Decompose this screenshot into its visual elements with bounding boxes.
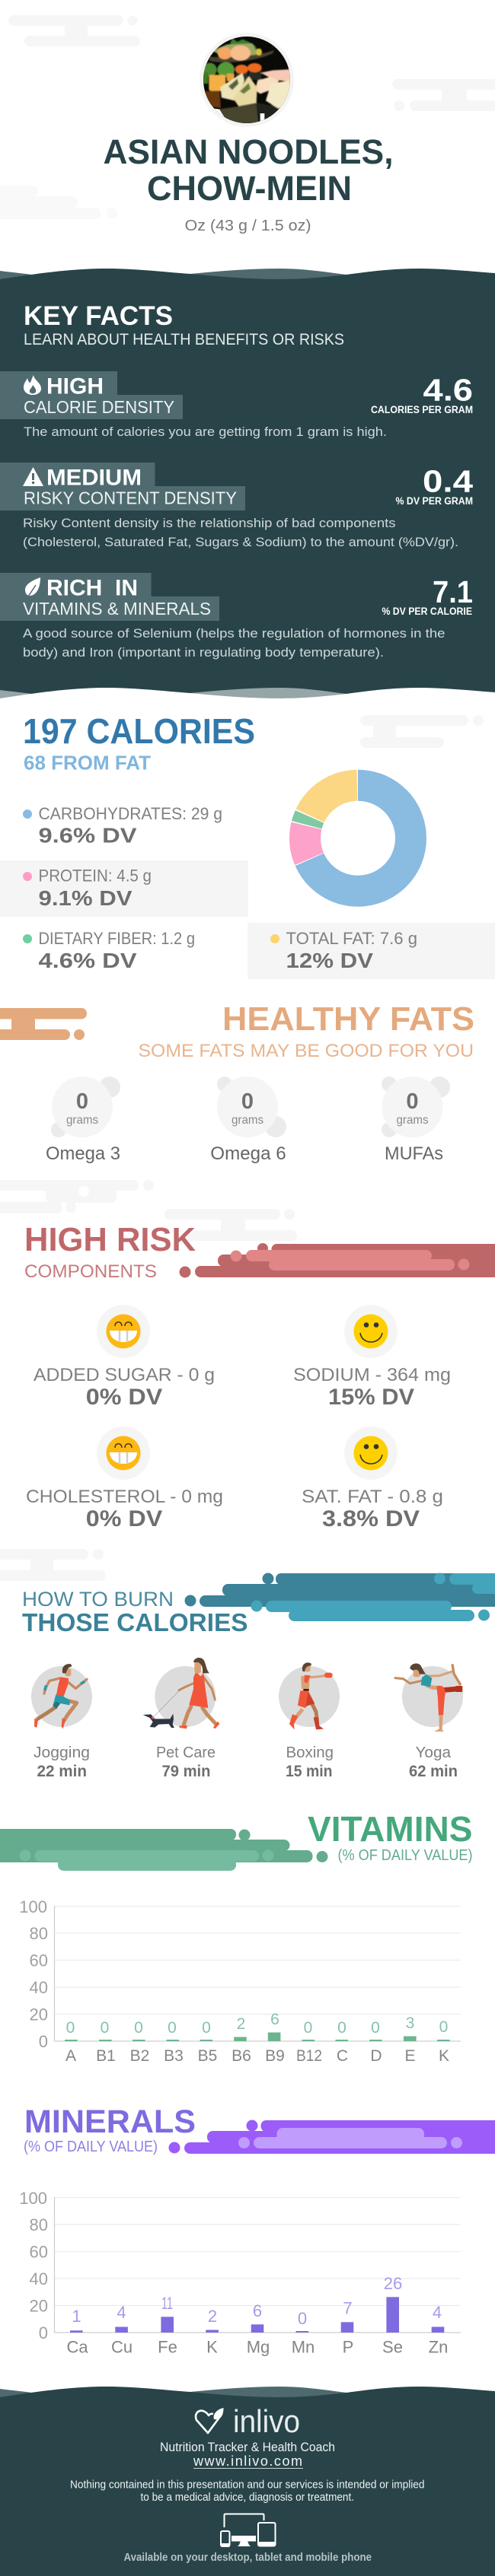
bar chart: minerals: 4 xyxy=(117,2303,126,2322)
vitamins and minerals row: body) and Iron (important in regulating body temperature). xyxy=(23,645,384,660)
omega 6 xyxy=(210,1077,286,1164)
bar chart: vitamins: 0 xyxy=(337,2019,346,2037)
activity: pet care: 79 min xyxy=(161,1763,210,1780)
bar chart: vitamins: D xyxy=(370,2047,382,2065)
legend: total fat xyxy=(248,923,495,979)
activity: jogging: Jogging xyxy=(34,1744,90,1761)
legend: protein xyxy=(0,860,248,917)
component: saturated fat: SAT. FAT - 0.8 g xyxy=(302,1487,443,1507)
heading: high risk xyxy=(24,1221,196,1282)
risky content row: 0.4 xyxy=(423,464,473,499)
heading: minerals: (% OF DAILY VALUE) xyxy=(24,2139,158,2155)
omega 6: 0 xyxy=(241,1089,254,1114)
bar chart: vitamins: B12 xyxy=(296,2047,322,2065)
legend: total fat: TOTAL FAT: 7.6 g xyxy=(286,929,417,948)
calorie density row: The amount of calories you are getting from 1 gram is high. xyxy=(24,425,387,439)
risky content row: % DV PER GRAM xyxy=(396,495,473,507)
vitamins and minerals row: A good source of Selenium (helps the regulation of hormones in the xyxy=(23,626,445,641)
omega 3: Omega 3 xyxy=(46,1143,120,1164)
legend: dietary fiber: 4.6% DV xyxy=(38,949,137,972)
vitamins and minerals row xyxy=(0,573,473,660)
bar chart: vitamins xyxy=(19,1897,461,2065)
background cloud: calories xyxy=(360,715,484,748)
legend: protein: 9.1% DV xyxy=(38,886,133,910)
logo: inlivo: inlivo xyxy=(233,2403,300,2439)
icon: smiling face xyxy=(353,1436,388,1470)
heading: burn calories: THOSE CALORIES xyxy=(22,1608,248,1636)
activity: yoga xyxy=(395,1663,463,1780)
title: CHOW-MEIN xyxy=(147,169,352,208)
heading: vitamins: VITAMINS xyxy=(308,1809,472,1849)
bar chart: minerals: Se xyxy=(382,2337,403,2357)
title xyxy=(104,132,393,208)
disclaimer xyxy=(70,2479,425,2504)
component: added sugar xyxy=(34,1305,215,1410)
key facts heading: KEY FACTS xyxy=(24,301,173,331)
bar chart: vitamins: C xyxy=(337,2047,348,2065)
bar chart: vitamins: 3 xyxy=(406,2015,414,2032)
bar chart: minerals: 100 xyxy=(19,2189,47,2208)
tagline: Nutrition Tracker & Health Coach xyxy=(160,2440,335,2454)
mufas: MUFAs xyxy=(385,1143,443,1164)
legend: protein: PROTEIN: 4.5 g xyxy=(38,866,152,886)
disclaimer: to be a medical advice, diagnosis or treatment. xyxy=(140,2492,354,2504)
bar chart: minerals: K xyxy=(206,2337,218,2357)
bar chart: vitamins: 0 xyxy=(439,2018,448,2036)
bar chart: vitamins: 40 xyxy=(30,1978,48,1997)
calorie density row: CALORIES PER GRAM xyxy=(371,404,473,415)
banner: burn calories xyxy=(184,1573,495,1621)
bar chart: vitamins: B9 xyxy=(265,2047,285,2065)
bar chart: vitamins: B6 xyxy=(232,2047,251,2065)
icon: boxer xyxy=(279,1662,340,1729)
banner: minerals xyxy=(169,2120,495,2154)
bar chart: vitamins: 20 xyxy=(30,2005,48,2024)
heading: high risk: COMPONENTS xyxy=(24,1261,157,1282)
bar chart: minerals: 1 xyxy=(72,2307,81,2326)
banner: healthy fats xyxy=(0,1008,87,1040)
icon: flame xyxy=(24,375,41,395)
risky content row: Risky Content density is the relationship of bad components xyxy=(23,516,396,530)
icon: devices xyxy=(221,2514,276,2547)
bar chart: vitamins: B5 xyxy=(198,2047,217,2065)
food photo xyxy=(200,32,295,128)
risky content row: MEDIUM xyxy=(46,466,142,490)
bar chart: minerals xyxy=(19,2189,461,2357)
vitamins and minerals row: VITAMINS & MINERALS xyxy=(23,599,211,619)
banner: vitamins xyxy=(0,1829,327,1871)
bar chart: vitamins: 6 xyxy=(270,2011,279,2028)
bar chart: vitamins: 60 xyxy=(30,1951,48,1970)
risky content row: RISKY CONTENT DENSITY xyxy=(24,488,237,508)
bar chart: vitamins: E xyxy=(404,2047,416,2065)
bar chart: minerals: Fe xyxy=(158,2337,177,2357)
bar chart: vitamins: B1 xyxy=(96,2047,116,2065)
availability note: Available on your desktop, tablet and mobile phone xyxy=(123,2552,372,2564)
website link: www.inlivo.com xyxy=(193,2454,302,2469)
activity: yoga: Yoga xyxy=(416,1744,452,1761)
legend: carbohydrates: CARBOHYDRATES: 29 g xyxy=(38,804,222,823)
activity: jogging: 22 min xyxy=(37,1763,87,1780)
omega 3: 0 xyxy=(76,1089,88,1114)
bar chart: vitamins: 0 xyxy=(66,2019,75,2037)
vitamins and minerals row: 7.1 xyxy=(433,574,473,609)
calorie density row: 4.6 xyxy=(423,373,473,408)
bar chart: minerals: Mn xyxy=(292,2337,315,2357)
component: saturated fat: 3.8% DV xyxy=(322,1506,420,1531)
icon: yoga pose xyxy=(395,1663,463,1732)
icon: grinning face xyxy=(107,1436,140,1470)
background clouds: high risk xyxy=(0,1180,297,1241)
icon: woman walking dog xyxy=(143,1658,219,1728)
component: cholesterol: 0% DV xyxy=(86,1506,162,1531)
legend: dietary fiber: DIETARY FIBER: 1.2 g xyxy=(38,929,195,948)
calorie density row: HIGH xyxy=(46,374,104,399)
heading: calories: 197 CALORIES xyxy=(23,711,255,751)
bar chart: vitamins: B2 xyxy=(130,2047,149,2065)
bar chart: minerals: 0 xyxy=(298,2309,307,2328)
bar chart: minerals: Cu xyxy=(111,2337,133,2357)
heading: healthy fats xyxy=(139,1000,474,1061)
bar chart: minerals: 7 xyxy=(343,2299,353,2317)
donut chart: calorie sources xyxy=(305,785,411,891)
heading: vitamins: (% OF DAILY VALUE) xyxy=(338,1847,472,1864)
bar chart: vitamins: 0 xyxy=(101,2019,109,2037)
bar chart: vitamins: 0 xyxy=(134,2019,143,2037)
heading: healthy fats: SOME FATS MAY BE GOOD FOR YOU xyxy=(139,1041,474,1061)
mufas: grams xyxy=(396,1114,428,1127)
omega 3 xyxy=(46,1077,120,1164)
bar chart: minerals: 26 xyxy=(384,2274,402,2293)
component: saturated fat xyxy=(302,1426,443,1531)
legend: total fat: 12% DV xyxy=(286,949,373,972)
activity: boxing: 15 min xyxy=(286,1763,332,1780)
mufas xyxy=(382,1077,450,1164)
banner: high risk xyxy=(180,1243,495,1278)
heading: minerals: MINERALS xyxy=(24,2104,196,2140)
bar chart: minerals: Ca xyxy=(66,2337,88,2357)
heading: healthy fats: HEALTHY FATS xyxy=(222,1000,474,1038)
vitamins and minerals row: % DV PER CALORIE xyxy=(382,606,472,617)
bar chart: minerals: P xyxy=(343,2337,353,2357)
icon: jogger xyxy=(31,1664,92,1728)
calorie density row xyxy=(0,371,473,439)
vitamins and minerals row: RICH IN xyxy=(46,575,138,601)
footer xyxy=(0,2387,495,2576)
bar chart: minerals: 0 xyxy=(39,2323,48,2342)
heading: burn calories: HOW TO BURN xyxy=(22,1588,174,1611)
key facts heading xyxy=(24,301,344,348)
bar chart: minerals: 80 xyxy=(30,2215,48,2234)
activity: jogging xyxy=(31,1664,92,1780)
legend: carbohydrates xyxy=(23,804,222,848)
bar chart: vitamins: B3 xyxy=(164,2047,184,2065)
logo: inlivo xyxy=(196,2403,300,2439)
activity: boxing xyxy=(279,1662,340,1780)
bar chart: vitamins: 2 xyxy=(237,2015,245,2033)
risky content row xyxy=(0,463,473,549)
component: added sugar: ADDED SUGAR - 0 g xyxy=(34,1365,215,1385)
icon: warning xyxy=(23,467,43,486)
component: sodium: 15% DV xyxy=(328,1385,414,1410)
icon: grinning face xyxy=(107,1315,140,1348)
icon: leaf xyxy=(25,577,40,596)
bar chart: minerals: 20 xyxy=(30,2296,48,2316)
bar chart: vitamins: K xyxy=(439,2047,449,2065)
disclaimer: Nothing contained in this presentation and our services is intended or implied xyxy=(70,2479,425,2491)
heading: calories xyxy=(23,711,255,774)
omega 6: Omega 6 xyxy=(210,1143,286,1164)
bar chart: vitamins: 0 xyxy=(371,2019,380,2037)
legend: carbohydrates: 9.6% DV xyxy=(38,823,137,848)
heading: burn calories xyxy=(22,1588,248,1636)
heading: high risk: HIGH RISK xyxy=(24,1221,196,1258)
bar chart: vitamins: 0 xyxy=(202,2019,211,2037)
bar chart: minerals: Zn xyxy=(429,2337,448,2357)
component: sodium xyxy=(293,1305,451,1410)
bar chart: minerals: 40 xyxy=(30,2269,48,2288)
panel: key facts xyxy=(0,269,495,708)
bar chart: minerals: 60 xyxy=(30,2243,48,2261)
serving size: Oz (43 g / 1.5 oz) xyxy=(184,218,311,234)
background clouds: header xyxy=(0,15,495,219)
mufas: 0 xyxy=(406,1089,419,1114)
bar chart: vitamins: 100 xyxy=(19,1897,47,1916)
bar chart: minerals: Mg xyxy=(247,2337,270,2357)
activity: boxing: Boxing xyxy=(286,1744,334,1761)
bar chart: vitamins: 0 xyxy=(304,2019,312,2037)
bar chart: vitamins: 0 xyxy=(39,2032,48,2051)
heading: calories: 68 FROM FAT xyxy=(24,752,151,774)
bar chart: minerals: 2 xyxy=(208,2307,217,2326)
legend: dietary fiber xyxy=(23,929,195,972)
component: sodium: SODIUM - 364 mg xyxy=(293,1365,451,1385)
background cloud: burn xyxy=(0,1549,106,1581)
bar chart: minerals: 11 xyxy=(161,2294,173,2313)
title: ASIAN NOODLES, xyxy=(104,132,393,171)
key facts heading: LEARN ABOUT HEALTH BENEFITS OR RISKS xyxy=(24,331,344,348)
bar chart: minerals: 4 xyxy=(433,2303,442,2322)
risky content row: (Cholesterol, Saturated Fat, Sugars & Sodium) to the amount (%DV/gr). xyxy=(23,535,458,549)
component: cholesterol xyxy=(26,1426,223,1531)
icon: smiling face xyxy=(353,1315,388,1348)
calorie density row: CALORIE DENSITY xyxy=(24,397,174,417)
activity: pet care: Pet Care xyxy=(156,1744,216,1761)
omega 3: grams xyxy=(66,1114,98,1127)
component: added sugar: 0% DV xyxy=(86,1385,162,1410)
component: cholesterol: CHOLESTEROL - 0 mg xyxy=(26,1487,223,1507)
activity: yoga: 62 min xyxy=(409,1763,458,1780)
bar chart: vitamins: 80 xyxy=(30,1924,48,1943)
bar chart: minerals: 6 xyxy=(253,2301,262,2320)
bar chart: vitamins: A xyxy=(65,2047,76,2065)
omega 6: grams xyxy=(232,1114,263,1127)
bar chart: vitamins: 0 xyxy=(168,2019,177,2037)
activity: pet care xyxy=(143,1658,219,1780)
